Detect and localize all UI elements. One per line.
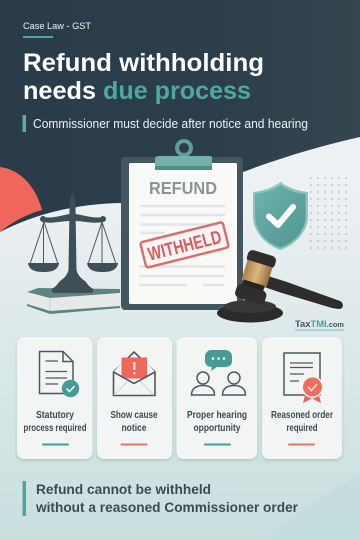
logo: TaxTMI.com: TaxTMI.com [295, 319, 344, 330]
icon: certificate with ribbon [284, 353, 324, 403]
panel: statutory process [17, 337, 92, 459]
panel: show cause notice: notice [122, 422, 147, 434]
coral circle decoration [0, 167, 42, 232]
gavel base [217, 304, 283, 322]
panel: reasoned order: Reasoned order [271, 409, 333, 421]
conclusion: without a reasoned Commissioner order [35, 499, 299, 515]
panel: proper hearing: Proper hearing [187, 409, 247, 421]
panel: statutory process: process required [24, 422, 86, 434]
icon: scales on book [27, 192, 120, 314]
icon: two people with speech bubble [192, 350, 246, 395]
stamp: withheld: WITHHELD [146, 227, 224, 266]
panel: reasoned order [262, 337, 342, 459]
subtitle: Commissioner must decide after notice and hearing [33, 117, 308, 131]
conclusion: Refund cannot be withheld [36, 481, 211, 497]
panel: proper hearing: opportunity [194, 422, 241, 434]
panel: proper hearing [176, 337, 257, 459]
gavel head [234, 249, 278, 305]
panel: statutory process: Statutory [36, 409, 74, 421]
title: Refund withholding [23, 49, 264, 77]
icon: shield [253, 182, 308, 250]
icon: gavel [217, 249, 343, 322]
scale [28, 192, 118, 293]
clipboard [121, 141, 243, 310]
category label [23, 21, 91, 38]
category label: Case Law - GST [23, 21, 91, 32]
document lines [139, 206, 225, 285]
clipboard clip [155, 141, 212, 170]
book [27, 288, 120, 314]
dot pattern [305, 172, 351, 252]
REFUND heading: REFUND [149, 178, 217, 198]
conclusion [22, 481, 299, 516]
title: needs [23, 77, 96, 105]
title: due process [103, 77, 251, 105]
panel: show cause notice [97, 337, 172, 459]
panel: show cause notice: Show cause [110, 409, 158, 421]
icon: envelope with alert [114, 352, 155, 396]
gavel handle [264, 276, 343, 309]
icon: document with check [40, 352, 79, 397]
title [23, 49, 264, 105]
panel: reasoned order: required [286, 422, 318, 434]
